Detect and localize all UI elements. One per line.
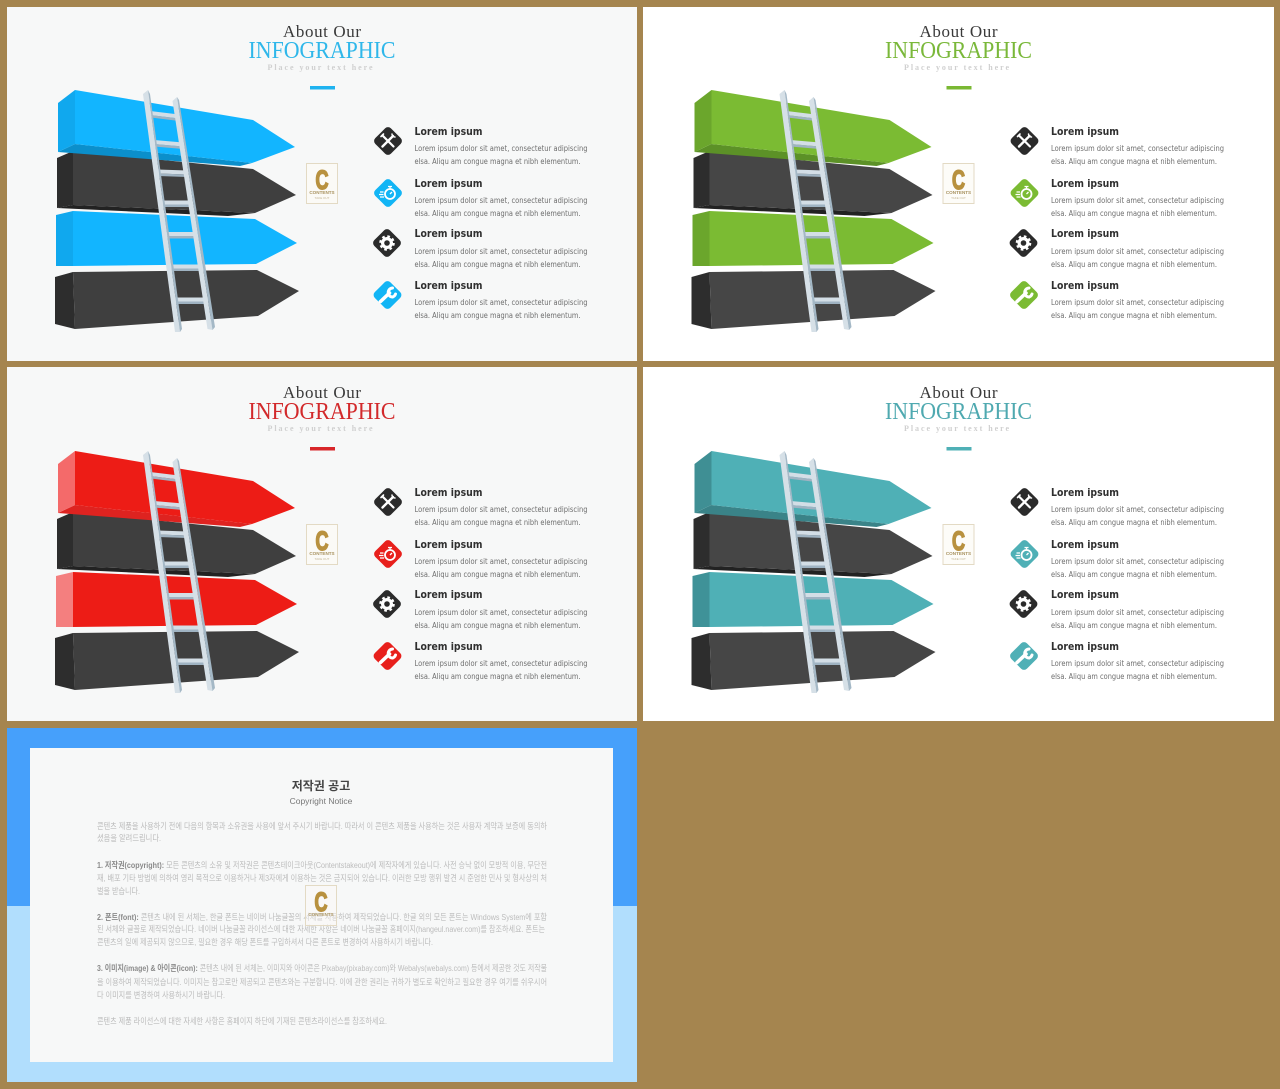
item 4: wrench: Lorem ipsum dolor sit amet, consectetur adipiscing — [414, 298, 588, 307]
ladder — [143, 90, 215, 332]
ladder — [780, 451, 852, 693]
text block: image and icon clause — [97, 962, 547, 1000]
item 4: wrench: elsa. Aliqu am congue magna et nibh elementum. — [414, 311, 580, 320]
title: blue panel — [248, 22, 396, 90]
title: red panel: Place your text here — [268, 424, 374, 433]
text block: introduction: 콘텐츠 제품을 사용하기 전에 다음의 항목과 소유권을 사용에 앞서 주시기 바랍니다. 따라서 이 콘텐츠 제품을 사용하는 것은 사용자 계약과 보증에 동의하 — [97, 820, 547, 831]
logo badge — [306, 524, 338, 564]
title: red panel: INFOGRAPHIC — [248, 399, 396, 425]
logo badge: TAKE OUT — [951, 557, 966, 561]
text block: copyright clause: 재, 배포 기타 방법에 의하여 영리 목적으로 이용하거나 제3자에게 이용하는 것은 금지되어 있습니다. 이러한 모방 행위 발견 시 준엄한 민사 및 형사상의 처 — [97, 872, 547, 883]
logo badge: TAKE OUT — [315, 557, 330, 561]
item 2: stopwatch: Lorem ipsum dolor sit amet, consectetur adipiscing — [1051, 196, 1224, 205]
panel: green infographic — [643, 7, 1274, 361]
text block: introduction — [97, 820, 547, 843]
item 1: tools: elsa. Aliqu am congue magna et nibh elementum. — [1051, 157, 1217, 166]
item 4: wrench: Lorem ipsum dolor sit amet, consectetur adipiscing — [1051, 298, 1224, 307]
text block: font clause: 콘텐츠의 일에 제공되지 않으므로, 필요한 경우 해당 폰트를 구입하셔서 다른 폰트로 변경하여 사용하시기 바랍니다. — [97, 936, 433, 947]
logo badge — [306, 164, 338, 204]
item 3: gear — [1008, 588, 1224, 630]
item 1: tools: elsa. Aliqu am congue magna et nibh elementum. — [414, 157, 580, 166]
text block: font clause — [97, 911, 547, 947]
logo badge: CONTENTS — [946, 190, 971, 195]
heading: copyright notice — [290, 778, 353, 806]
item 4: wrench: Lorem ipsum dolor sit amet, consectetur adipiscing — [414, 659, 588, 668]
title: green panel: Place your text here — [904, 63, 1011, 72]
item 2: stopwatch: elsa. Aliqu am congue magna et nibh elementum. — [1051, 570, 1217, 579]
item 3: gear — [371, 588, 588, 630]
item 4: wrench: elsa. Aliqu am congue magna et nibh elementum. — [1051, 311, 1217, 320]
item 2: stopwatch: Lorem ipsum — [414, 539, 483, 551]
arrow stack: teal and dark — [692, 451, 936, 690]
item 1: tools: elsa. Aliqu am congue magna et nibh elementum. — [414, 518, 580, 527]
logo badge: CONTENTS — [946, 551, 971, 556]
item 2: stopwatch: elsa. Aliqu am congue magna et nibh elementum. — [414, 570, 580, 579]
logo badge — [943, 164, 974, 204]
text block: introduction: 셨음을 알려드립니다. — [97, 832, 161, 843]
item 3: gear: elsa. Aliqu am congue magna et nibh elementum. — [1051, 260, 1217, 269]
item 3: gear: Lorem ipsum — [1051, 228, 1119, 240]
panel: copyright notice — [7, 728, 637, 1082]
heading: copyright notice: Copyright Notice — [290, 796, 353, 806]
item 2: stopwatch — [372, 177, 588, 218]
logo badge: C — [316, 165, 328, 195]
item 1: tools: Lorem ipsum — [1051, 487, 1119, 499]
item 3: gear — [371, 227, 588, 269]
ladder — [780, 90, 852, 332]
item 4: wrench — [372, 640, 588, 681]
title: blue panel: About Our — [283, 22, 361, 41]
item 1: tools — [1009, 486, 1224, 527]
item 2: stopwatch — [1009, 538, 1224, 579]
logo badge: CONTENTS — [309, 190, 335, 195]
item 1: tools — [372, 125, 588, 166]
item 1: tools: Lorem ipsum dolor sit amet, consectetur adipiscing — [414, 505, 588, 514]
text block: copyright clause: 1. 저작권(copyright): 모든 콘텐츠의 소유 및 저작권은 콘텐츠테이크아웃(Contentstakeout)에 제작자에게 있습니다. 사전 승낙 없이 모방적 이용, 무단전 — [97, 859, 547, 870]
logo badge: TAKE OUT — [315, 196, 330, 200]
item 4: wrench — [372, 279, 588, 320]
item 3: gear: elsa. Aliqu am congue magna et nibh elementum. — [414, 621, 580, 630]
item 3: gear — [1008, 227, 1224, 269]
logo badge: CONTENTS — [309, 551, 335, 556]
item 2: stopwatch: elsa. Aliqu am congue magna et nibh elementum. — [1051, 209, 1217, 218]
item 1: tools: Lorem ipsum — [414, 487, 483, 499]
logo badge — [306, 886, 336, 926]
logo badge: C — [316, 526, 328, 556]
text block: image and icon clause: 3. 이미지(image) & 아이콘(icon): 콘텐츠 내에 된 서체는, 이미지와 아이콘은 Pixabay(pixabay.com)와 Webalys(webalys.com) 등에서 제공한 것도 저작물 — [97, 962, 547, 973]
title: blue panel: Place your text here — [268, 63, 374, 72]
ladder — [143, 451, 215, 693]
item 1: tools — [372, 486, 588, 527]
item 4: wrench — [1008, 640, 1224, 681]
logo badge: C — [952, 165, 965, 195]
item 1: tools: elsa. Aliqu am congue magna et nibh elementum. — [1051, 518, 1217, 527]
item 3: gear: Lorem ipsum — [1051, 589, 1119, 601]
title: teal panel: INFOGRAPHIC — [885, 399, 1032, 425]
heading: copyright notice: 저작권 공고 — [292, 778, 350, 793]
title: teal panel: Place your text here — [904, 424, 1011, 433]
logo badge: C — [314, 887, 328, 917]
title: green panel: About Our — [920, 22, 998, 41]
arrow stack: blue and dark — [55, 90, 299, 329]
item 3: gear: elsa. Aliqu am congue magna et nibh elementum. — [414, 260, 580, 269]
title: red panel: About Our — [283, 383, 361, 402]
item 2: stopwatch — [372, 538, 588, 579]
item 4: wrench: Lorem ipsum — [1051, 280, 1119, 292]
item 2: stopwatch: elsa. Aliqu am congue magna et nibh elementum. — [414, 209, 580, 218]
title: teal panel — [885, 383, 1032, 450]
item 4: wrench: elsa. Aliqu am congue magna et nibh elementum. — [1051, 672, 1217, 681]
item 4: wrench: Lorem ipsum — [1051, 641, 1119, 653]
text block: copyright clause: 벌을 받습니다. — [97, 886, 140, 896]
title: green panel — [885, 22, 1032, 90]
item 2: stopwatch: Lorem ipsum — [1051, 539, 1119, 551]
panel: red infographic — [7, 367, 637, 721]
item 2: stopwatch: Lorem ipsum dolor sit amet, consectetur adipiscing — [414, 196, 588, 205]
text block: font clause: 된 서체와 글꼴로 제작되었습니다. 네이버 나눔글꼴 라이선스에 대한 자세한 사항은 네이버 나눔글꼴 홈페이지(hangeul.naver.com)를 참조하세요. 폰트는 — [97, 923, 545, 934]
arrow stack: green and dark — [692, 90, 936, 329]
item 3: gear: Lorem ipsum dolor sit amet, consectetur adipiscing — [414, 608, 588, 617]
item 1: tools: Lorem ipsum dolor sit amet, consectetur adipiscing — [414, 144, 588, 153]
item 1: tools — [1009, 125, 1224, 166]
item 3: gear: Lorem ipsum dolor sit amet, consectetur adipiscing — [414, 247, 588, 256]
item 4: wrench — [1008, 279, 1224, 320]
item 3: gear: Lorem ipsum — [414, 589, 483, 601]
arrow stack: red and dark — [55, 451, 299, 690]
text block: font clause: 2. 폰트(font): 콘텐츠 내에 된 서체는, 한글 폰트는 네이버 나눔글꼴의 서체를 사용하여 제작되었습니다. 한글 외의 모든 폰트는 Windows System에 포함 — [97, 911, 547, 922]
item 3: gear: Lorem ipsum dolor sit amet, consectetur adipiscing — [1051, 247, 1224, 256]
item 4: wrench: Lorem ipsum — [414, 641, 483, 653]
item 1: tools: Lorem ipsum dolor sit amet, consectetur adipiscing — [1051, 144, 1224, 153]
item 1: tools: Lorem ipsum dolor sit amet, consectetur adipiscing — [1051, 505, 1224, 514]
item 3: gear: Lorem ipsum — [414, 228, 483, 240]
item 2: stopwatch: Lorem ipsum — [414, 178, 483, 190]
logo badge: TAKE OUT — [951, 196, 966, 200]
item 2: stopwatch: Lorem ipsum — [1051, 178, 1119, 190]
item 3: gear: elsa. Aliqu am congue magna et nibh elementum. — [1051, 621, 1217, 630]
title: teal panel: About Our — [920, 383, 998, 402]
text block: copyright clause — [97, 859, 547, 896]
title: green panel: INFOGRAPHIC — [885, 38, 1032, 64]
item 2: stopwatch: Lorem ipsum dolor sit amet, consectetur adipiscing — [414, 557, 588, 566]
item 1: tools: Lorem ipsum — [414, 126, 483, 138]
panel: teal infographic — [643, 367, 1274, 721]
text block: image and icon clause: 을 이용하여 제작되었습니다. 이미지는 참고로만 제공되고 콘텐츠와는 구분합니다. 이에 관한 권리는 귀하가 별도로 확인하고 필요한 경우 여기를 쉬우시어 — [97, 976, 547, 987]
item 4: wrench: Lorem ipsum — [414, 280, 483, 292]
logo badge: C — [952, 526, 965, 556]
title: red panel — [248, 383, 396, 450]
item 4: wrench: elsa. Aliqu am congue magna et nibh elementum. — [414, 672, 580, 681]
logo badge — [943, 524, 974, 564]
panel: blue infographic — [7, 7, 637, 361]
logo badge: CONTENTS — [308, 912, 334, 917]
text block: license note: 콘텐츠 제품 라이선스에 대한 자세한 사항은 홈페이지 하단에 기재된 콘텐츠라이선스를 참조하세요. — [97, 1015, 387, 1026]
item 1: tools: Lorem ipsum — [1051, 126, 1119, 138]
title: blue panel: INFOGRAPHIC — [248, 38, 396, 64]
item 2: stopwatch: Lorem ipsum dolor sit amet, consectetur adipiscing — [1051, 557, 1224, 566]
item 3: gear: Lorem ipsum dolor sit amet, consectetur adipiscing — [1051, 608, 1224, 617]
item 4: wrench: Lorem ipsum dolor sit amet, consectetur adipiscing — [1051, 659, 1224, 668]
text block: image and icon clause: 다 이미지를 변경하여 사용하시기 바랍니다. — [97, 989, 225, 1000]
item 2: stopwatch — [1009, 177, 1224, 218]
